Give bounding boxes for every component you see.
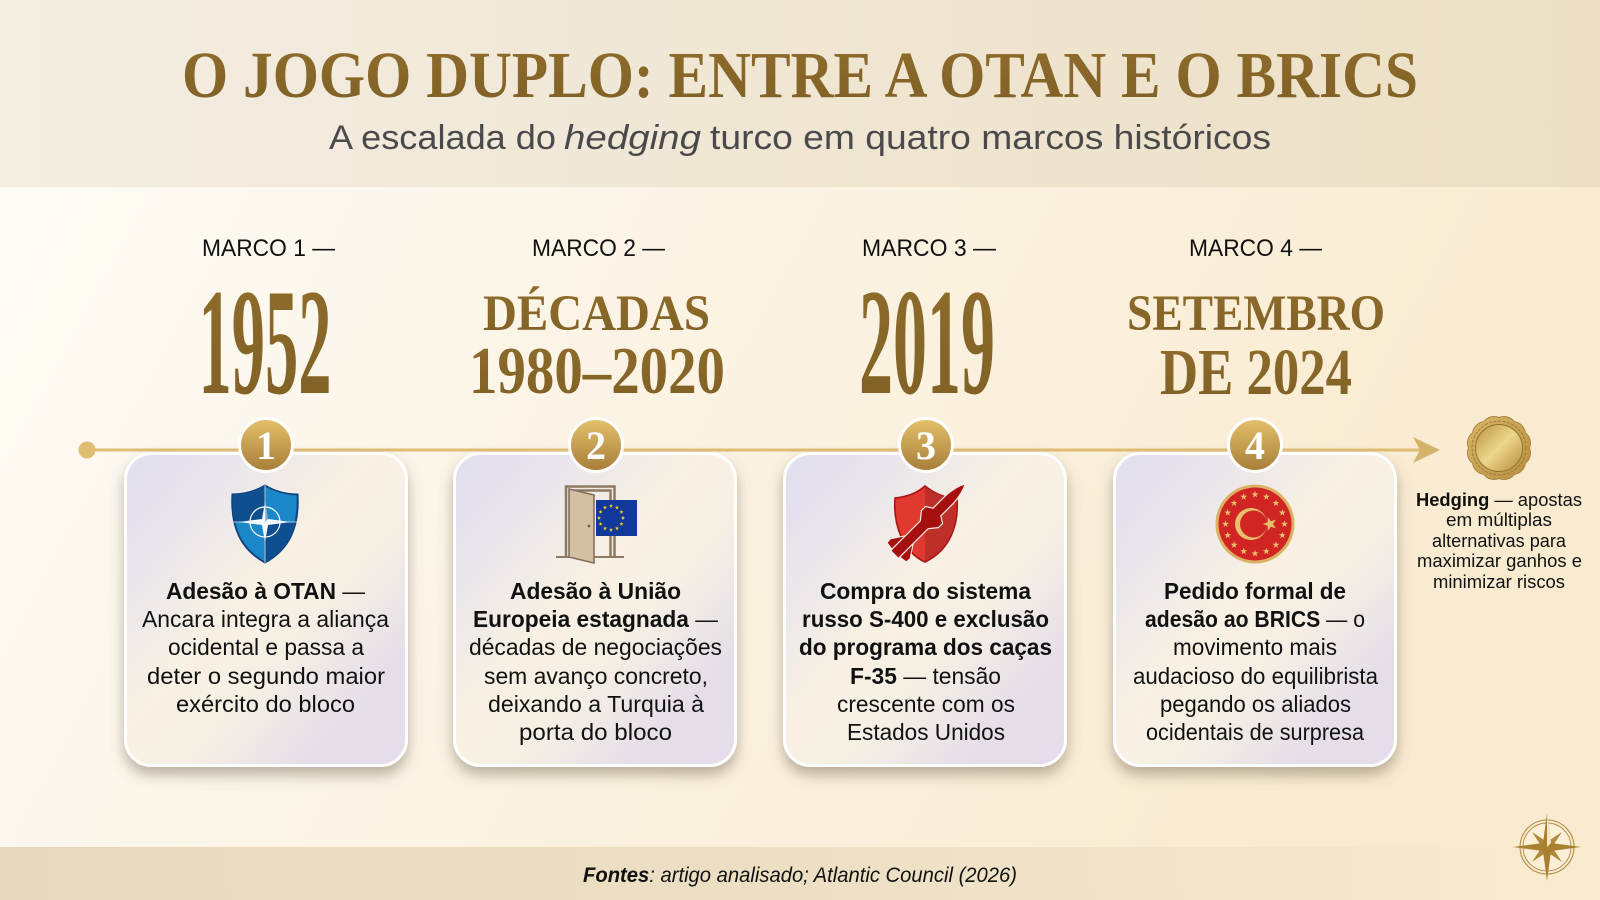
card 1 text: ocidental e passa a — [168, 634, 364, 660]
card 2 text: sem avanço concreto, — [484, 663, 708, 689]
card 2 text: Europeia estagnada — — [473, 606, 718, 632]
text: 2019 — [859, 258, 995, 426]
card 4 text: Pedido formal de — [1164, 578, 1346, 604]
number badge 4: 4 — [1245, 423, 1265, 468]
card 4 text: audacioso do equilibrista — [1133, 663, 1378, 689]
subtitle — [329, 119, 1271, 157]
hedging definition — [1416, 489, 1582, 592]
card 2 text — [469, 578, 722, 745]
icon: gold seal — [1468, 417, 1530, 479]
card 3 text: F-35 — tensão — [850, 663, 1001, 689]
panel: card 2 — [454, 454, 736, 766]
icon: NATO shield — [232, 485, 298, 563]
subtitle: A escalada do — [329, 119, 556, 157]
header band — [0, 0, 1600, 187]
panel: card 1 — [126, 454, 406, 766]
card 3 text: do programa dos caças — [799, 634, 1052, 660]
number badge 2: 2 — [586, 423, 606, 468]
hedging definition: alternativas para — [1432, 530, 1567, 551]
card 3 text: russo S-400 e exclusão — [802, 606, 1049, 632]
column 2: marco label: MARCO 2 — — [532, 235, 665, 262]
card 4 text: pegando os aliados — [1160, 691, 1351, 717]
text: 1952 — [198, 258, 332, 426]
card 1 text: exército do bloco — [176, 691, 355, 717]
number badge 3: 3 — [916, 423, 936, 468]
card 1 text: Ancara integra a aliança — [142, 606, 389, 632]
column 3: marco label: MARCO 3 — — [862, 235, 996, 262]
number badge 1 — [240, 418, 292, 472]
card 2 text: deixando a Turquia à — [488, 691, 704, 717]
number badge 4 — [1228, 418, 1282, 472]
column 4: marco label: MARCO 4 — — [1189, 235, 1322, 262]
card 3 text: Compra do sistema — [820, 578, 1031, 604]
card 4 text: ocidentais de surpresa — [1146, 719, 1364, 745]
number badge 3 — [900, 418, 952, 472]
column 4: date: DE 2024 — [1160, 336, 1352, 409]
card 2 text: Adesão à União — [510, 578, 681, 604]
card 2 text: porta do bloco — [519, 719, 672, 745]
card 3 text: crescente com os — [837, 691, 1015, 717]
card 1 text — [142, 578, 389, 717]
column 2: period: DÉCADAS — [483, 286, 710, 342]
card 3 text: Estados Unidos — [847, 719, 1005, 745]
timeline line — [78, 437, 1440, 463]
column 1: marco label: MARCO 1 — — [202, 235, 335, 262]
card 4 text: adesão ao BRICS — o — [1145, 606, 1365, 632]
hedging definition: maximizar ganhos e — [1417, 550, 1582, 571]
card 2 text: décadas de negociações — [469, 634, 722, 660]
panel: card 3 — [784, 454, 1066, 766]
icon: shield and missile — [885, 474, 975, 564]
icon: compass rose — [1513, 813, 1581, 881]
footer band — [0, 847, 1600, 900]
card 3 text — [799, 578, 1052, 745]
column 2: period: 1980–2020 — [469, 334, 725, 408]
icon: door and EU flag — [556, 486, 637, 563]
hedging definition: Hedging — apostas — [1416, 489, 1582, 510]
panel: card 4 — [1114, 454, 1396, 766]
subtitle: turco em quatro marcos históricos — [710, 119, 1271, 157]
sources: Fontes: artigo analisado; Atlantic Council (2026) — [583, 864, 1017, 887]
number badge 1: 1 — [256, 423, 276, 468]
subtitle: hedging — [564, 119, 701, 157]
card 4 text — [1133, 578, 1378, 745]
hedging definition: minimizar riscos — [1433, 571, 1565, 592]
column 2: period — [469, 286, 725, 408]
hedging definition: em múltiplas — [1446, 509, 1552, 530]
card 4 text: movimento mais — [1173, 634, 1337, 660]
card 1 text: Adesão à OTAN — — [166, 578, 365, 604]
title: O JOGO DUPLO: ENTRE A OTAN E O BRICS — [182, 39, 1418, 112]
column 4: date: SETEMBRO — [1127, 286, 1385, 342]
icon: Turkish seal — [1216, 484, 1294, 564]
column 4: date — [1127, 286, 1385, 409]
number badge 2 — [570, 418, 622, 472]
arrow head — [1413, 437, 1440, 463]
card 1 text: deter o segundo maior — [147, 663, 385, 689]
